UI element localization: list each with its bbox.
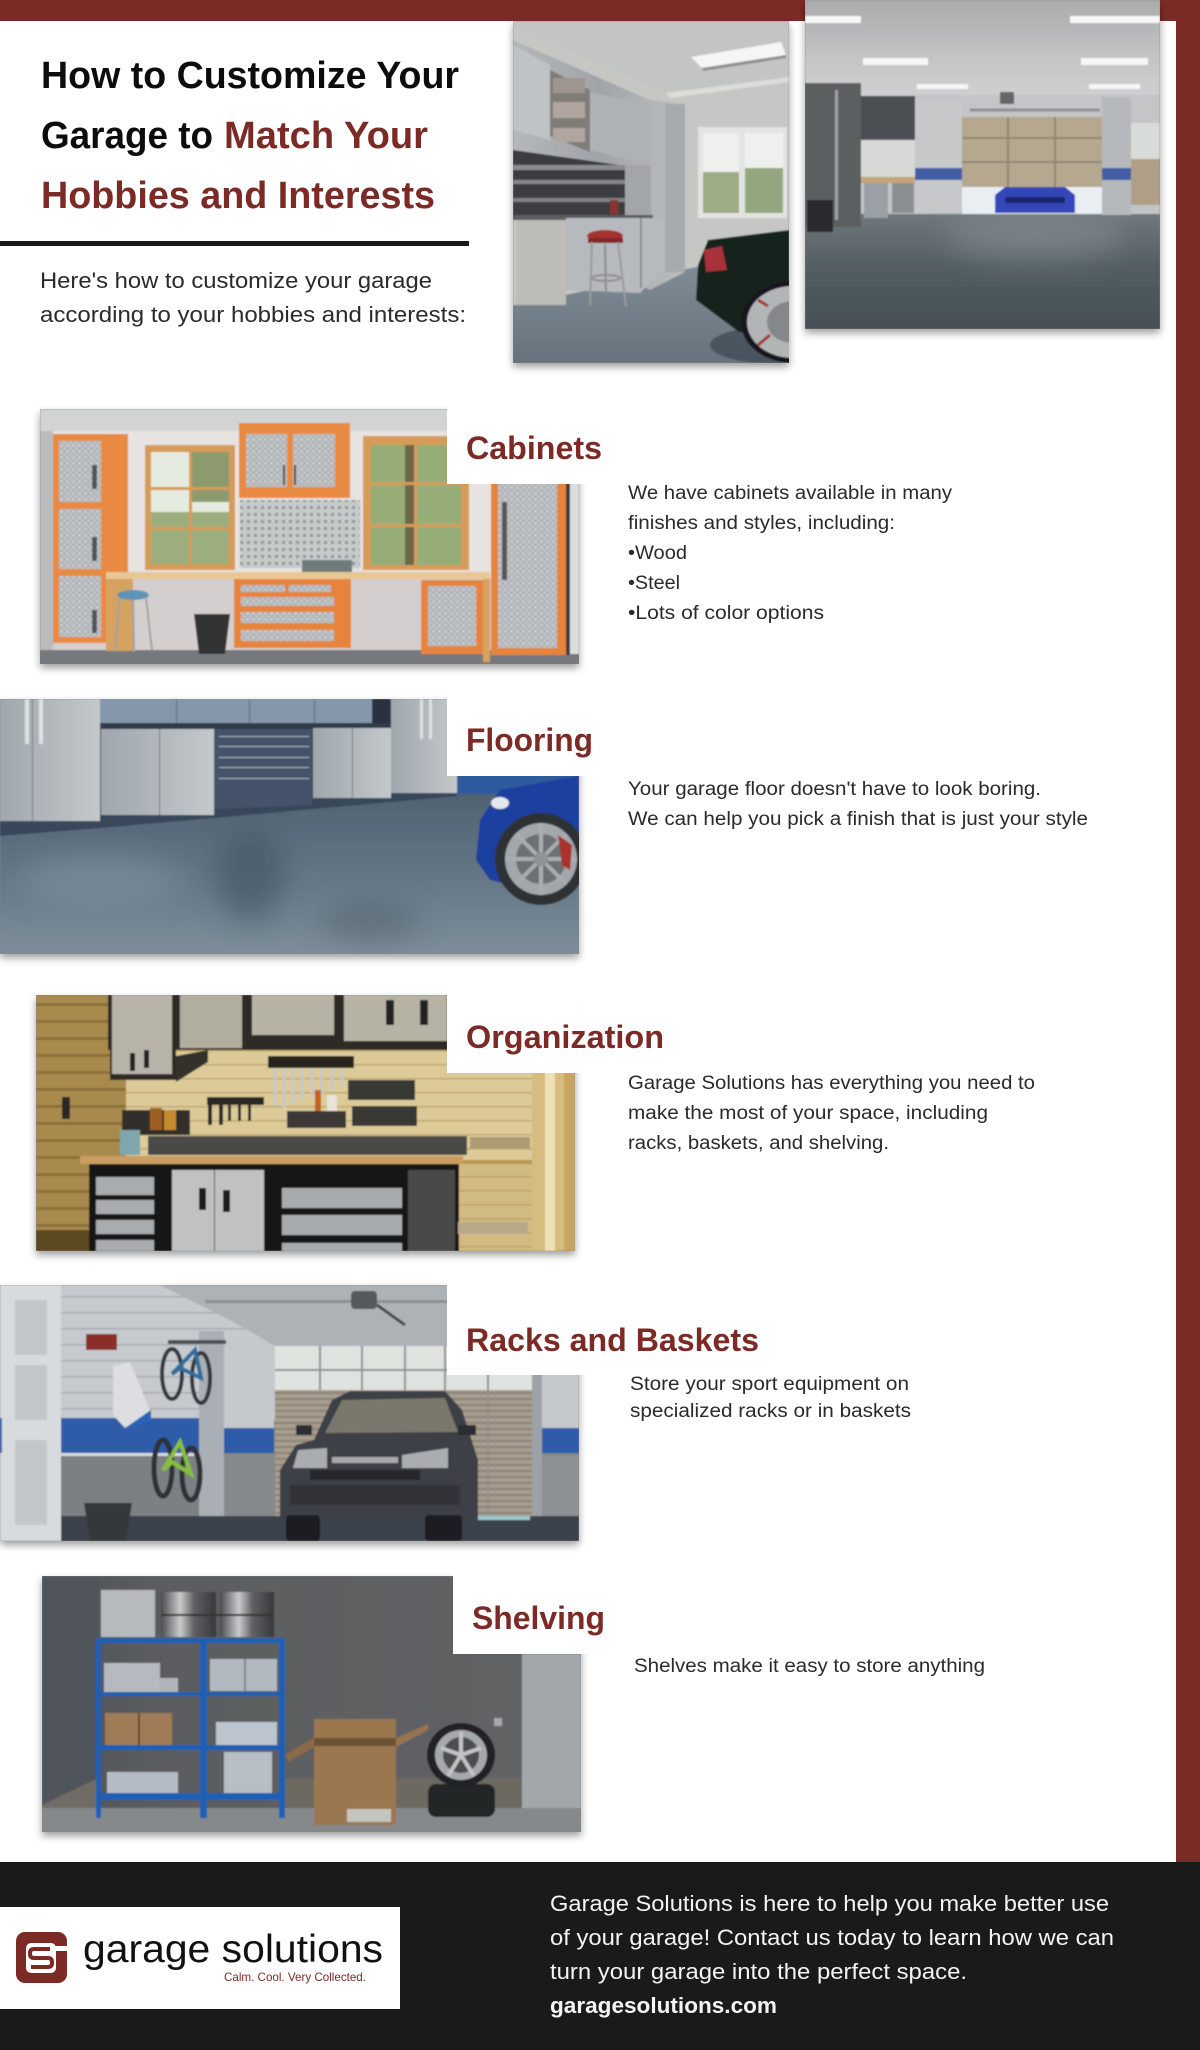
cabinets description: We have cabinets available in many [628, 483, 953, 504]
label backing [447, 1278, 587, 1375]
title divider [0, 241, 469, 246]
footer call to action: of your garage! Contact us today to learn how we can [550, 1925, 1114, 1950]
cabinets description: •Steel [628, 573, 680, 594]
intro text: according to your hobbies and interests: [40, 302, 466, 327]
logo panel [0, 1907, 400, 2009]
racks description: specialized racks or in baskets [630, 1401, 911, 1422]
section: racks and baskets [0, 1278, 911, 1541]
blue bag [113, 1362, 151, 1428]
title [41, 55, 459, 217]
window one [145, 445, 235, 570]
drawers [234, 579, 351, 648]
racks description [630, 1374, 911, 1422]
section: cabinets [40, 400, 953, 664]
racks description: Store your sport equipment on [630, 1374, 909, 1395]
heading: racks and baskets: Racks and Baskets [466, 1322, 759, 1358]
right tall cabinet [490, 484, 568, 656]
flooring description [628, 779, 1088, 830]
photo: blue shelves and boxes [42, 1576, 581, 1832]
title: Match Your [224, 115, 428, 157]
label backing [453, 1568, 588, 1654]
organization description: Garage Solutions has everything you need to [628, 1073, 1035, 1094]
countertop [80, 1156, 463, 1164]
cabinets description: finishes and styles, including: [628, 513, 895, 534]
green bike [154, 1440, 200, 1500]
footer call to action [550, 1891, 1114, 2018]
photo: garage with bikes and dark SUV [0, 1285, 579, 1541]
section: shelving [42, 1568, 985, 1832]
stool [117, 590, 149, 600]
pegboard [240, 500, 360, 568]
footer call to action: turn your garage into the perfect space. [550, 1959, 967, 1984]
cabinets description [628, 483, 953, 624]
heading: shelving: Shelving [472, 1600, 605, 1636]
items on top [101, 1590, 155, 1637]
tires [428, 1784, 495, 1817]
center cabinet [172, 1170, 264, 1251]
footer call to action: Garage Solutions is here to help you make better use [550, 1891, 1109, 1916]
door [0, 1285, 61, 1541]
heading: cabinets: Cabinets [466, 430, 602, 466]
photo: polished floor and blue car [0, 699, 587, 954]
logo wordmark: garage solutions [83, 1928, 383, 1971]
organization description [628, 1073, 1035, 1154]
shelving description: Shelves make it easy to store anything [634, 1656, 985, 1677]
logo tagline: Calm. Cool. Very Collected. [224, 1970, 366, 1984]
counter [106, 572, 490, 579]
photo: wide garage interior with blue car [805, 0, 1160, 329]
red rack [86, 1334, 117, 1350]
intro text [40, 268, 466, 327]
organization description: racks, baskets, and shelving. [628, 1133, 889, 1154]
heading: organization: Organization [466, 1019, 664, 1055]
section: flooring [0, 692, 1088, 954]
drawer unit left [96, 1177, 154, 1251]
drawer unit right [282, 1188, 402, 1251]
section: organization [36, 988, 1035, 1251]
power strip [148, 1136, 467, 1155]
icon: garage solutions mark [16, 1932, 68, 1983]
label backing [447, 692, 587, 776]
trash bin [194, 614, 230, 654]
photo: tool wall and workbench [36, 995, 575, 1251]
flooring description: Your garage floor doesn't have to look boring. [628, 779, 1041, 800]
footer call to action: garagesolutions.com [550, 1993, 777, 2018]
title: How to Customize Your [41, 55, 459, 97]
blue bike [162, 1349, 210, 1403]
left tall cabinet [53, 434, 128, 643]
dark suv [280, 1391, 478, 1541]
right maroon side band [1176, 0, 1200, 1863]
heading: flooring: Flooring [466, 722, 593, 758]
tools [268, 1056, 354, 1068]
cabinets description: •Wood [628, 543, 687, 564]
cardboard box [285, 1735, 318, 1762]
title: Hobbies and Interests [41, 175, 435, 217]
label backing [447, 400, 587, 484]
top maroon bar [0, 0, 1200, 21]
small cabinet [421, 580, 483, 654]
ceiling lights [805, 16, 1160, 89]
photo: orange cabinets [40, 409, 579, 664]
trash bin [84, 1503, 132, 1541]
garage opener [351, 1291, 377, 1309]
photo: garage workbench corner with dark car [508, 21, 794, 372]
blue rack [96, 1638, 285, 1818]
upper cabinet [239, 423, 350, 498]
flooring description: We can help you pick a finish that is just your style [628, 809, 1088, 830]
organization description: make the most of your space, including [628, 1103, 988, 1124]
title: Garage to [41, 115, 213, 157]
intro text: Here's how to customize your garage [40, 268, 432, 293]
upper cabinets [108, 995, 448, 1050]
label backing [447, 988, 582, 1073]
cabinets description: •Lots of color options [628, 603, 824, 624]
window two [363, 436, 469, 570]
footer band [0, 1862, 1200, 2050]
shelf items [104, 1663, 160, 1692]
